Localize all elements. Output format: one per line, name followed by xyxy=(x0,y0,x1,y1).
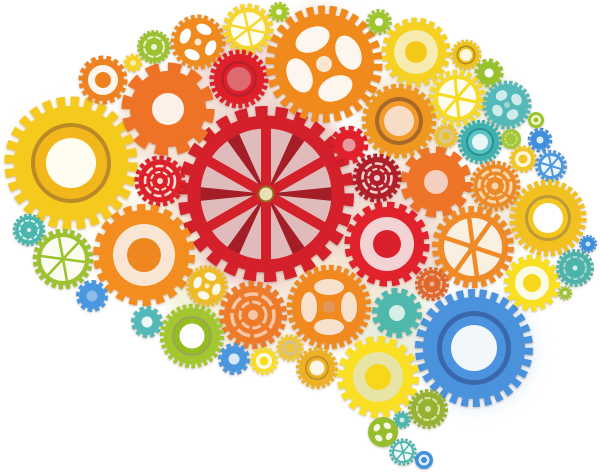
gear: green web bottom xyxy=(410,390,446,428)
gear: tiny green top xyxy=(270,3,288,21)
gear: orange ring right xyxy=(364,86,434,156)
gear: tiny blue right xyxy=(580,236,596,252)
gear: red small xyxy=(332,128,366,162)
gear: teal web far left xyxy=(14,215,44,245)
gear: blue left xyxy=(78,282,106,310)
gear: blue spokes xyxy=(536,152,566,180)
gear: yellow large right xyxy=(512,182,584,254)
gear: tiny yellow xyxy=(125,55,141,71)
gear: big red wheel xyxy=(184,112,348,276)
gear: green web small xyxy=(501,129,521,149)
gear: large yellow left xyxy=(10,102,132,224)
gear: dark red web xyxy=(354,156,400,200)
gear: green web xyxy=(138,32,170,62)
gear: teal spokes bottom xyxy=(390,440,416,464)
gear: red web left xyxy=(136,158,184,204)
gear: orange web small xyxy=(416,268,448,300)
gear: green ring bottom xyxy=(162,306,222,366)
gear: green small top xyxy=(368,10,390,34)
soft shadow behind gears xyxy=(10,5,536,410)
gear: green top right xyxy=(476,60,502,86)
gear: orange flat right xyxy=(404,150,468,214)
gear: gold small bottom xyxy=(278,336,302,360)
gear: yellow bottom xyxy=(251,348,277,374)
gear: orange flat top left xyxy=(126,67,210,151)
gear: orange web bottom xyxy=(222,284,284,346)
gear: yellow ring small right xyxy=(510,146,536,172)
gear: green four-hole xyxy=(368,417,398,447)
gear: green spokes xyxy=(35,231,91,287)
gear: yellow ring right bottom xyxy=(506,257,558,309)
gear: orange ring large left xyxy=(96,208,192,302)
gear: teal center bottom xyxy=(374,290,420,336)
gear: teal ring xyxy=(460,122,500,162)
gear: gold ring bottom center xyxy=(298,348,336,388)
gear: orange web right xyxy=(472,162,518,210)
gear: blue bottom tip xyxy=(415,451,433,469)
gear: orange four-hole top xyxy=(173,17,223,67)
gear: teal bottom left xyxy=(132,308,162,336)
gear: orange spokes large xyxy=(435,209,511,285)
gear: yellow spokes top xyxy=(225,6,271,52)
gear: teal four-hole xyxy=(484,82,530,128)
gear: yellow large bottom xyxy=(340,339,416,415)
gear: red ring top xyxy=(212,52,266,106)
gear: teal web right xyxy=(558,250,592,286)
gear: big blue xyxy=(420,294,528,402)
gear: orange four-hole bottom xyxy=(290,268,368,346)
gear: yellow four-hole bottom xyxy=(188,266,226,306)
gear: big orange four-hole xyxy=(270,10,378,118)
hub: brass pin xyxy=(258,186,274,202)
gear: small yellow ring xyxy=(452,41,480,69)
gear: small yellow hub xyxy=(435,125,457,147)
gear: tiny teal bottom xyxy=(394,412,410,428)
gear: blue small xyxy=(529,129,551,151)
gear: blue bottom xyxy=(220,344,248,374)
gear: tiny green right xyxy=(528,112,544,128)
gear: yellow spokes right xyxy=(431,72,483,124)
gear: small orange ring xyxy=(81,58,125,102)
gear: red ring xyxy=(348,204,426,284)
gear: tiny green lower right xyxy=(558,286,572,300)
gear: yellow ring top right xyxy=(384,20,448,84)
